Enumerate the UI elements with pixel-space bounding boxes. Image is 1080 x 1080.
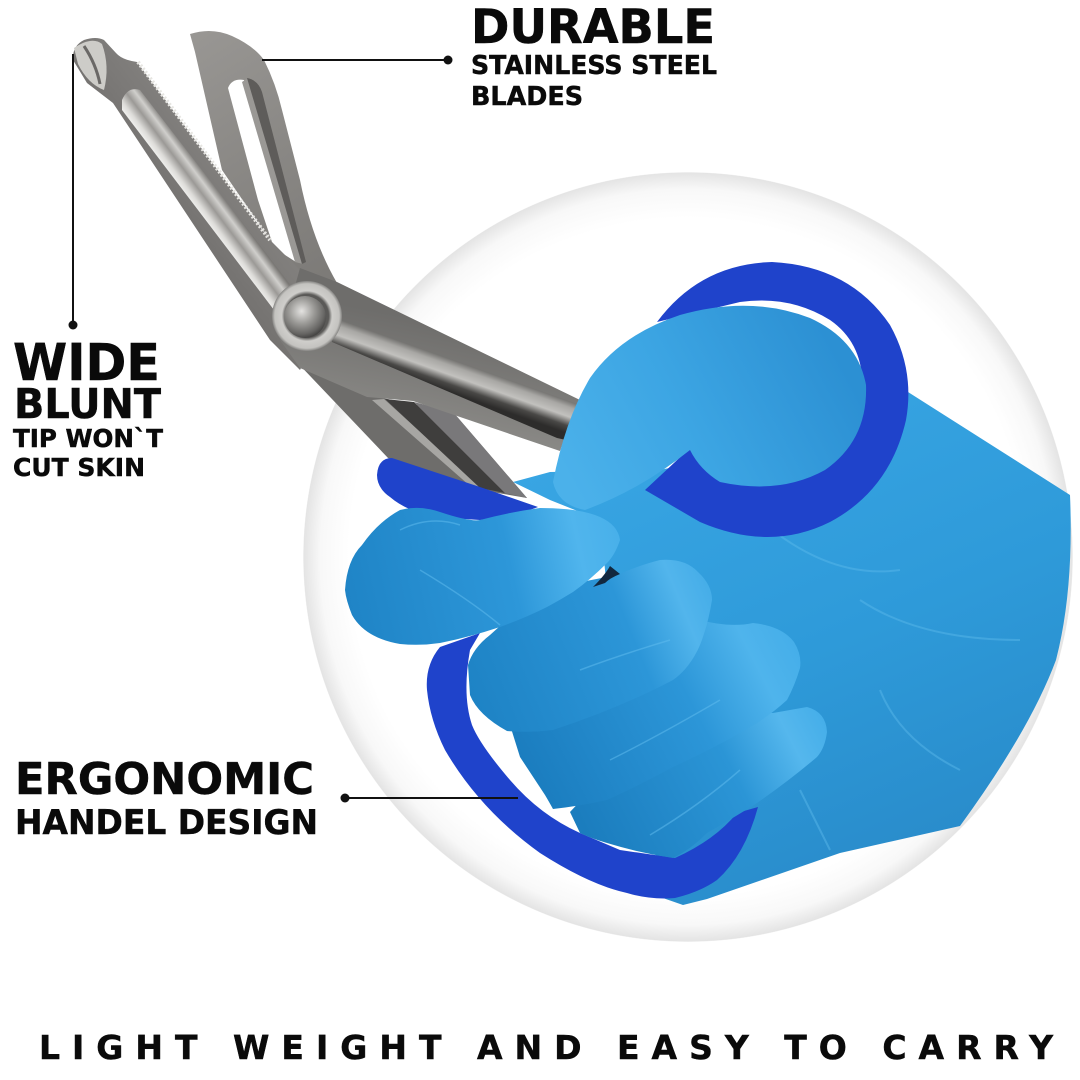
footer text: LIGHT WEIGHT AND EASY TO CARRY	[39, 1028, 1054, 1067]
text block: wide blunt: CUT SKIN	[13, 453, 145, 482]
glove hand	[345, 262, 1071, 905]
text block: ergonomic: HANDEL DESIGN	[15, 803, 318, 843]
back blade	[190, 31, 337, 283]
small shadow gap	[593, 566, 620, 587]
scissors illustration	[73, 31, 580, 498]
index finger	[345, 508, 620, 645]
background disc	[303, 172, 1073, 942]
text block: ergonomic: ERGONOMIC	[15, 754, 314, 805]
lower shank	[293, 358, 527, 498]
text block: durable	[471, 0, 717, 112]
front blade rail	[122, 89, 290, 310]
palm creases	[760, 520, 1020, 850]
palm and wrist	[513, 392, 1071, 905]
lower handle loop	[427, 633, 758, 898]
upper shank tube	[332, 318, 577, 440]
little finger	[570, 707, 827, 858]
ring finger	[510, 620, 800, 809]
thumb	[553, 306, 866, 510]
callout: wide leader	[68, 54, 78, 330]
pivot screw	[284, 296, 326, 338]
upper shank	[280, 268, 580, 451]
text block: wide blunt: WIDE	[13, 334, 160, 393]
text block: ergonomic	[15, 754, 318, 843]
finger tang	[377, 458, 538, 520]
text block: durable: BLADES	[471, 82, 583, 112]
middle finger	[468, 560, 712, 732]
text block: wide blunt: TIP WON`T	[13, 424, 163, 453]
blunt tip highlight	[74, 41, 107, 90]
finger wrinkles	[400, 521, 740, 835]
back blade slot	[228, 80, 296, 262]
text block: durable: STAINLESS STEEL	[471, 51, 717, 81]
text block: wide blunt: BLUNT	[14, 380, 161, 428]
callout: durable leader	[262, 56, 452, 64]
text block: wide blunt	[13, 334, 163, 482]
pivot collar	[272, 281, 342, 351]
front blade	[73, 38, 340, 370]
text block: durable: DURABLE	[471, 0, 715, 55]
top handle loop	[645, 262, 908, 537]
back blade inner rod	[242, 78, 303, 264]
serrated edge	[138, 62, 270, 240]
callout: ergonomic leader	[340, 794, 518, 802]
